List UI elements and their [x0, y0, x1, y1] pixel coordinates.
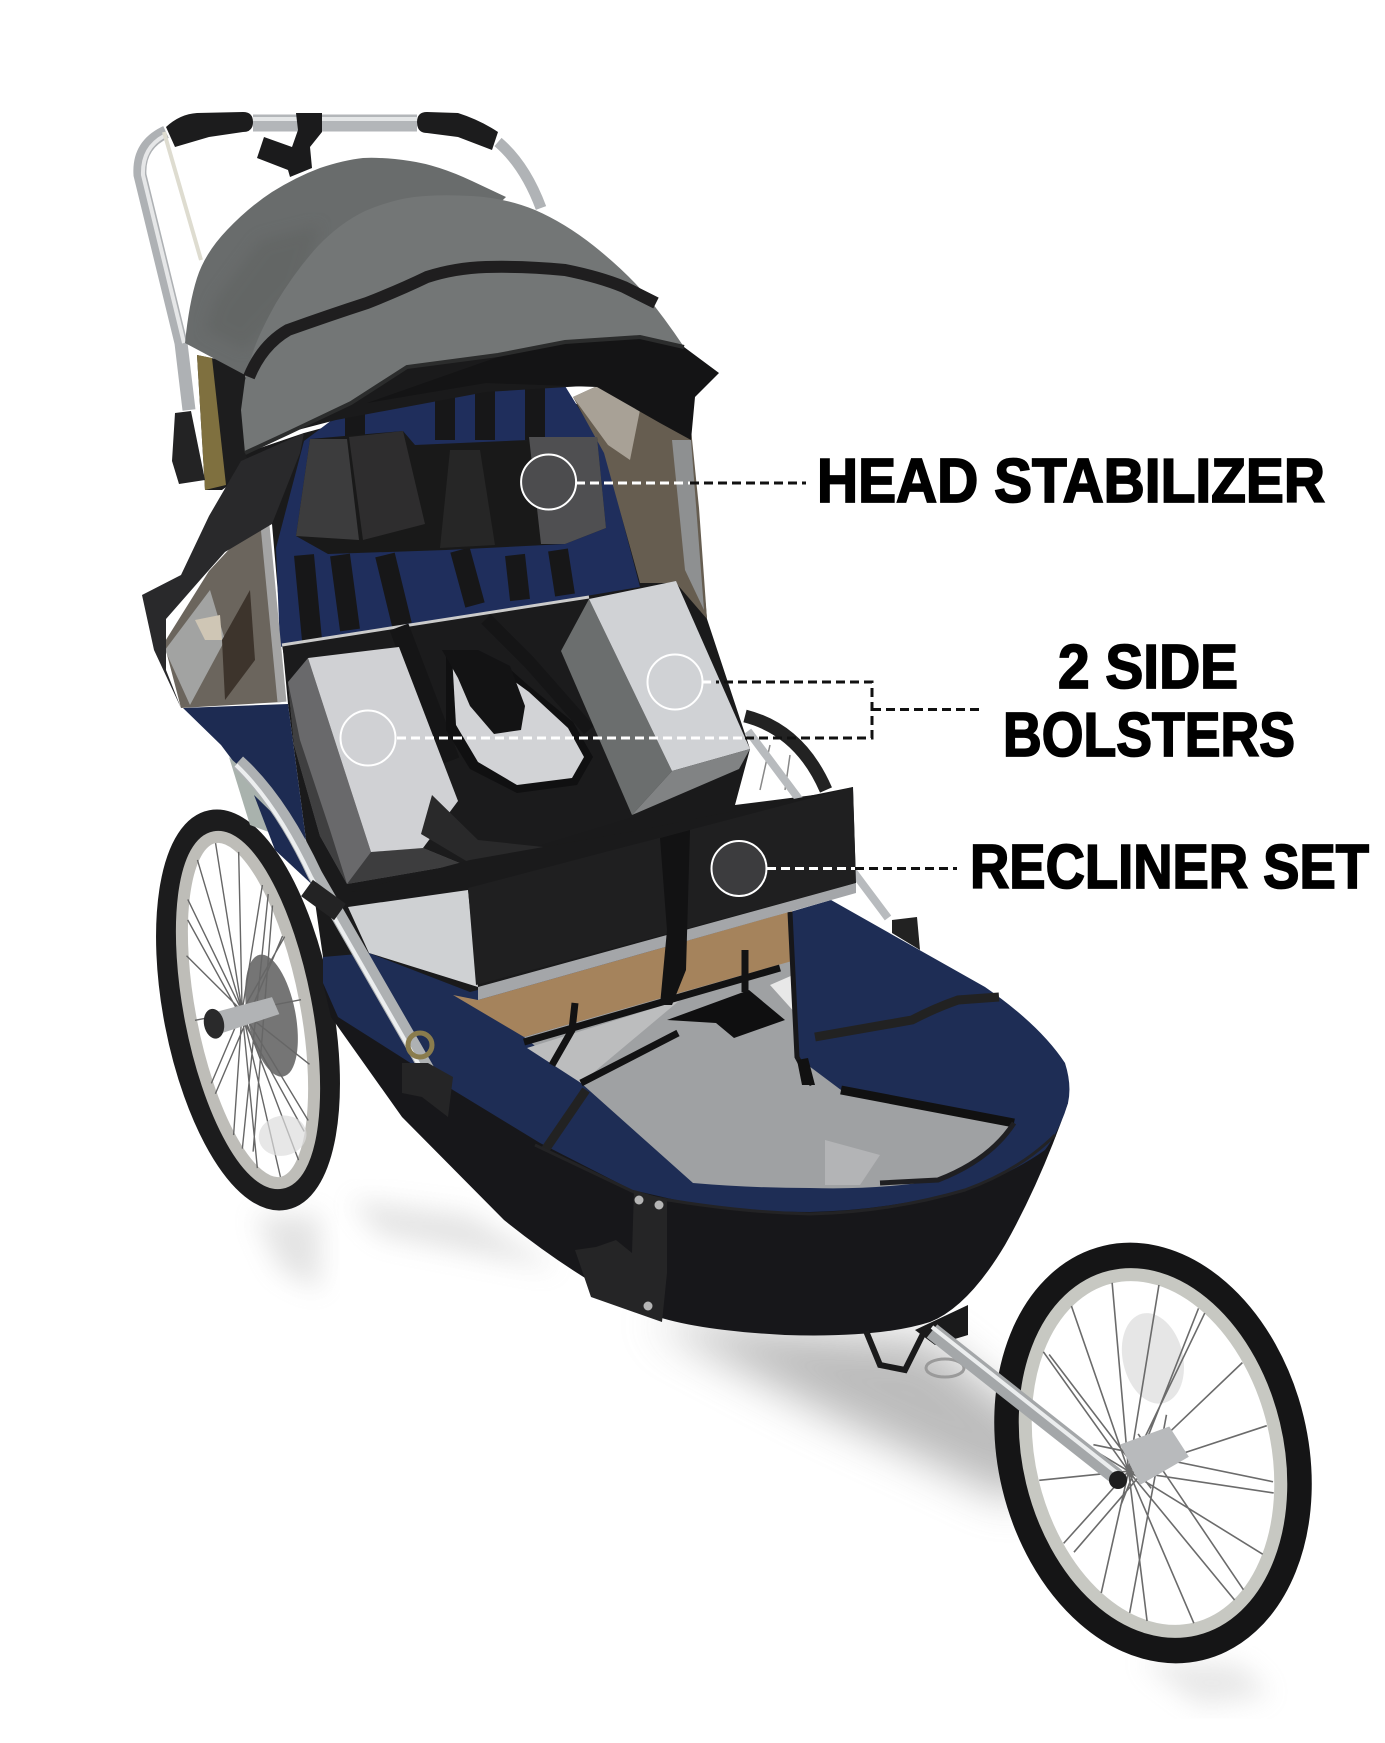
navy side panel — [183, 704, 306, 840]
black drape — [142, 433, 304, 708]
label: HEAD STABILIZER — [817, 447, 1325, 516]
hitch strap and ring — [866, 1305, 968, 1377]
storage floor — [524, 960, 1014, 1188]
seat back navy — [276, 386, 640, 647]
left frame tube — [236, 762, 430, 1077]
marker circle — [521, 454, 576, 510]
rear seat frame and tan sliver — [197, 355, 250, 490]
rear canopy — [185, 158, 506, 375]
marker left — [340, 710, 396, 766]
callout: side bolsters: BOLSTERS — [1003, 701, 1295, 770]
leader line — [576, 482, 806, 484]
right bolster — [561, 581, 750, 815]
front canopy — [241, 195, 684, 453]
seat backing — [245, 380, 856, 1000]
front fork tube — [932, 1327, 1127, 1489]
stroller illustration — [139, 112, 1338, 1705]
marker circle — [712, 841, 766, 896]
pale side panel — [229, 757, 290, 840]
seat band — [282, 597, 640, 884]
rear wheel — [139, 807, 357, 1213]
under seat straps and buckle — [524, 950, 797, 1083]
tan fabric — [453, 911, 792, 1037]
left clear window — [164, 515, 282, 708]
handle bar — [166, 112, 498, 177]
chest pad — [399, 619, 593, 793]
front wheel — [968, 1225, 1338, 1681]
callout: head stabilizer — [521, 447, 1325, 516]
callout: side bolsters — [340, 633, 1295, 770]
left handle tube — [140, 132, 201, 410]
rim seam — [535, 1135, 1055, 1214]
right handle tube — [498, 142, 541, 208]
callout: recliner set — [712, 833, 1369, 902]
rim strap — [545, 1090, 586, 1150]
recliner cushion — [348, 787, 856, 1005]
flap details — [790, 912, 1014, 1183]
ground shadows — [255, 1200, 1270, 1705]
canopy underside — [290, 350, 600, 432]
label: 2 SIDE — [1058, 633, 1238, 702]
cart black underside — [323, 983, 1068, 1335]
right clear window — [573, 386, 707, 619]
buckle strap — [421, 795, 553, 868]
canopy mesh — [367, 337, 719, 440]
left bolster — [288, 647, 462, 884]
head stabilizer pad — [296, 431, 606, 554]
seat clamp — [172, 411, 205, 484]
far rear wheel — [745, 716, 826, 790]
cart navy rim and flap — [323, 900, 1069, 1212]
right frame tube and clamp — [748, 731, 920, 950]
front hitch bracket — [575, 1190, 667, 1322]
seat back straps — [304, 380, 565, 640]
axle pin and ring — [402, 1033, 453, 1117]
marker right — [648, 654, 702, 710]
leader line — [767, 867, 957, 870]
bracket leader lines — [397, 682, 983, 738]
